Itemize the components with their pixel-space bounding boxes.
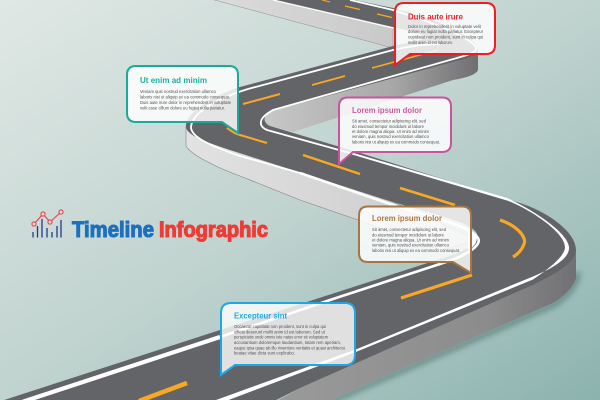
callout: pink: et dolore magna aliqua. Ut enim ad minim <box>352 129 429 134</box>
title <box>72 217 268 242</box>
callout: blue: officia deserunt mollit anim id est laborum. Sed ut <box>234 330 326 334</box>
callout: teal: velit esse cillum dolore eu fugiat nulla pariatur. <box>140 105 225 110</box>
white outer line of the right bend <box>205 154 569 400</box>
callout: blue: Excepteur sint <box>234 312 287 320</box>
callout: red: cupidatat non proident, sunt in culpa qui <box>408 35 483 40</box>
callout: red: mollit anim id est laborum. <box>408 40 453 45</box>
callout: brown: Sit amet, consectetur adipiscing elit, sed <box>372 227 447 232</box>
callout: teal: Duis aute irure dolor in reprehenderit in voluptate <box>140 100 232 105</box>
logo icon: chart <box>32 210 63 238</box>
callout: brown: do eiusmod tempor incididunt ut labore <box>372 232 445 237</box>
road shadow <box>325 272 578 400</box>
road side wall: right bend <box>275 250 576 400</box>
callout: teal: Veniam quis nostrud exercitation ullamco <box>140 89 217 94</box>
icon bars <box>33 219 61 238</box>
callout: teal <box>127 66 238 133</box>
callout: brown: veniam, quis nostrud exercitation ullamco <box>372 243 450 248</box>
callout: pink: do eiusmod tempor incididunt ut labore <box>352 124 425 129</box>
callout: pink: laboris nisi ut aliquip ex ea commodo consequat. <box>352 140 440 144</box>
callout: pink: Sit amet, consectetur adipiscing elit, sed <box>352 118 427 124</box>
road side wall: third leg <box>262 52 478 132</box>
callout: red <box>395 3 495 65</box>
callout: teal: laboris nisi ut aliquip ex ea commodo consequat. <box>140 95 230 100</box>
callout: brown: laboris nisi ut aliquip ex ea commodo consequat. <box>372 248 460 253</box>
callout: red: dolore eu fugiat nulla pariatur. Excepteur <box>408 29 484 34</box>
callout: pink: veniam, quis nostrud exercitation ullamco <box>352 134 430 139</box>
callout: blue <box>221 303 355 375</box>
callout: brown <box>359 206 471 273</box>
callout: teal: Ut enim ad minim <box>140 76 207 85</box>
callout: blue: accusantium doloremque laudantium, totam rem aperiam, <box>234 340 341 345</box>
callout: red: Duis aute irure <box>408 12 463 22</box>
callout: blue: perspiciatis unde omnis iste natus error sit voluptatem <box>234 334 328 340</box>
callout: blue: Occaecat cupidatat non proident, sunt in culpa qui <box>234 324 326 329</box>
callout: blue: eaque ipsa quae ab illo inventore veritatis et quasi architecto <box>234 346 346 350</box>
icon line <box>32 210 63 226</box>
callout: brown: et dolore magna aliqua. Ut enim ad minim <box>372 238 449 242</box>
callout: blue: beatae vitae dicta sunt explicabo. <box>234 350 295 356</box>
callout: red: Dolor in reprehenderit in voluptate velit <box>408 24 482 29</box>
road side wall: far leg <box>207 0 393 48</box>
road side wall: left bend <box>186 126 478 250</box>
title: Infographic <box>159 217 268 242</box>
callout: pink <box>339 98 451 164</box>
title: Timeline <box>72 217 154 242</box>
callout: brown: Lorem ipsum dolor <box>372 214 443 223</box>
yellow centre dashes <box>139 0 525 400</box>
white edge lines <box>22 0 479 400</box>
white hairpin tip <box>468 230 477 250</box>
callout: pink: Lorem ipsum dolor <box>352 106 423 115</box>
